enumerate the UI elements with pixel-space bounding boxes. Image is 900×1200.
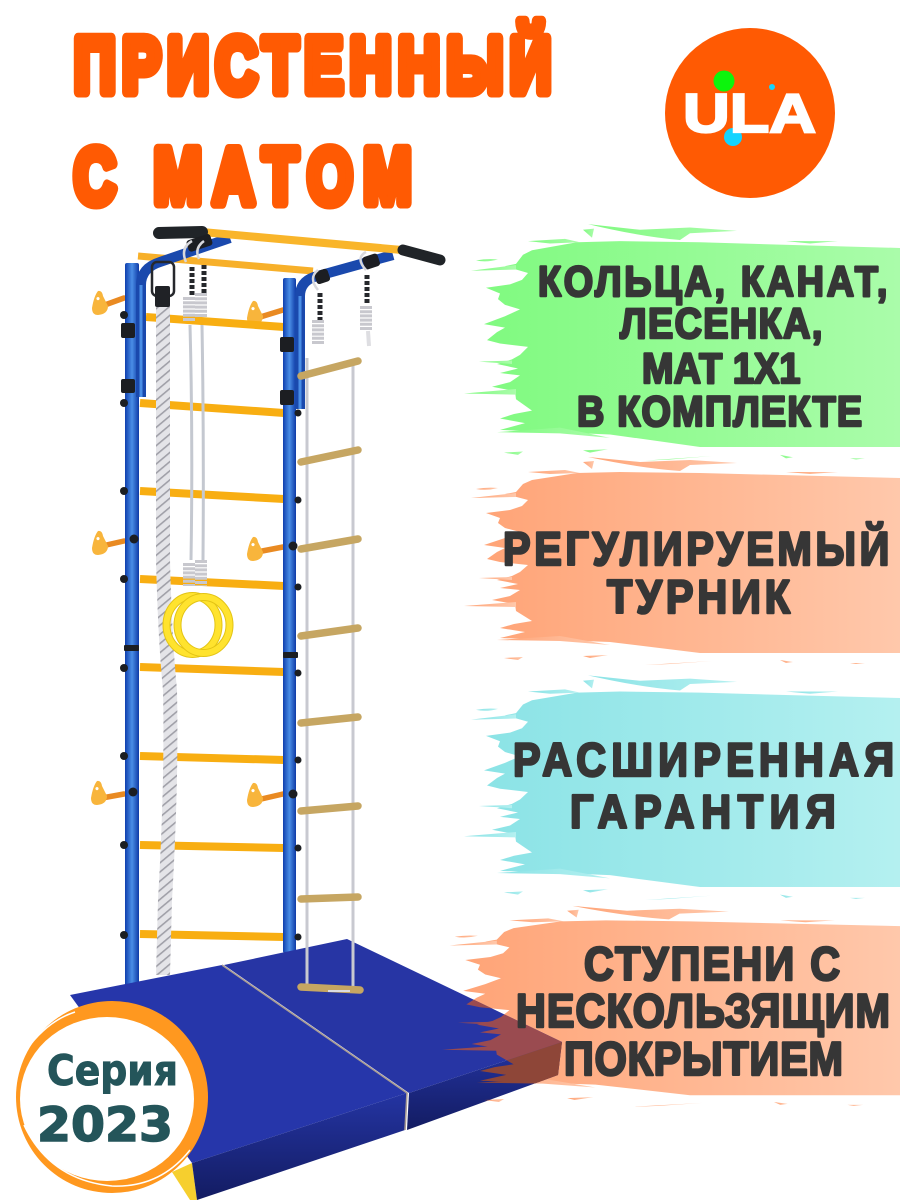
pull-up bar [159, 232, 440, 260]
back bar [138, 256, 313, 271]
text: adjustable bar: РЕГУЛИРУЕМЫЙ [503, 521, 889, 576]
badge: series 2023: 2023 [37, 1098, 173, 1153]
text: non-slip steps: ПОКРЫТИЕМ [564, 1034, 843, 1086]
title: ПРИСТЕННЫЙ [74, 22, 551, 109]
text: adjustable bar [503, 521, 889, 624]
text: extended warranty: ГАРАНТИЯ [570, 787, 836, 839]
rungs [140, 317, 284, 937]
logo: ULA [665, 28, 835, 198]
text: non-slip steps [516, 939, 890, 1086]
panel: green brush [464, 224, 900, 461]
text: non-slip steps: НЕСКОЛЬЗЯЩИМ [516, 986, 890, 1038]
text: set contents: ЛЕСЕНКА, [620, 299, 822, 348]
text: extended warranty: РАСШИРЕННАЯ [513, 735, 894, 787]
clamps and bolts [120, 233, 381, 941]
text: extended warranty [513, 735, 894, 839]
text: set contents [538, 257, 887, 436]
title [74, 22, 551, 220]
wall bars [91, 232, 440, 988]
logo: ULA: ULA [683, 82, 816, 144]
wall brackets [91, 291, 283, 807]
badge: series 2023: Серия [47, 1046, 178, 1095]
gymnastic rings [166, 241, 369, 654]
title: С МАТОМ [74, 133, 411, 220]
text: non-slip steps: СТУПЕНИ С [584, 939, 840, 991]
chains and springs [184, 241, 369, 586]
curved tubes [141, 238, 393, 409]
text: set contents: МАТ 1Х1 [642, 344, 800, 393]
text: adjustable bar: ТУРНИК [607, 572, 791, 624]
rope ladder [301, 358, 360, 991]
text: set contents: В КОМПЛЕКТЕ [577, 387, 862, 436]
text: set contents: КОЛЬЦА, КАНАТ, [538, 257, 887, 306]
right post [283, 278, 296, 953]
panel: cyan brush warranty [464, 675, 900, 900]
left post [125, 263, 139, 988]
mat [70, 939, 562, 1200]
rope [152, 262, 174, 975]
panel: orange brush turnik [464, 457, 900, 665]
badge: series 2023 [16, 1001, 208, 1193]
panel overlap on mat [442, 1000, 562, 1100]
panel: orange brush steps [442, 906, 900, 1107]
